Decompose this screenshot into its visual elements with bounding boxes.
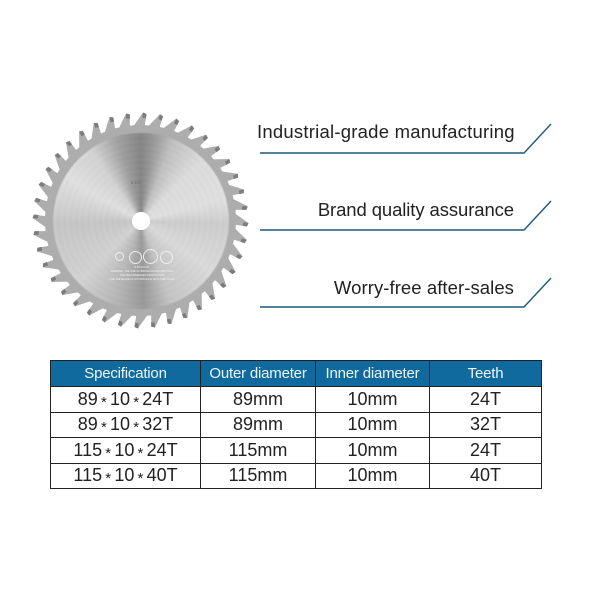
specification table: 89mm	[233, 414, 283, 434]
specification table: 115mm	[229, 440, 287, 460]
specification table: 115*10*40T	[73, 465, 178, 487]
feature text: Worry-free after-sales	[334, 277, 514, 298]
specification table: Outer diameter	[209, 365, 307, 382]
specification table: 89*10*24T	[78, 389, 173, 411]
feature text: Brand quality assurance	[318, 199, 514, 220]
specification table: 32T	[470, 414, 501, 434]
top blade marking: S 10T	[131, 180, 141, 185]
specification table: 10mm	[347, 440, 398, 460]
underline with slanted tick	[260, 124, 552, 154]
specification table: 24T	[470, 440, 501, 460]
specification table: 89mm	[233, 389, 283, 409]
specification table: 24T	[470, 389, 501, 409]
underline with slanted tick	[260, 278, 552, 308]
feature: worry-free after-sales	[260, 277, 552, 308]
polished disc	[52, 132, 228, 308]
blade engraving: USE THE BLADE IN ACCORDANCE WITH THE RULES	[109, 278, 175, 281]
specification table: 10mm	[347, 389, 398, 409]
feature text: Industrial-grade manufacturing	[257, 121, 515, 142]
blade teeth and outer ring	[32, 112, 248, 328]
specification table: 115*10*24T	[73, 440, 178, 462]
feature: brand quality assurance	[260, 199, 552, 231]
blade engraving	[109, 266, 175, 281]
certification seals	[115, 249, 173, 264]
specification table: Teeth	[468, 365, 503, 382]
specification table: 89*10*32T	[78, 414, 173, 436]
underline with slanted tick	[260, 200, 552, 231]
specification table: 115mm	[229, 465, 287, 485]
blade engraving: WARNING: THE USE OF BRUSH GUARD AND TOOL	[110, 270, 174, 273]
specification table: 10mm	[347, 414, 398, 434]
blade engraving: B 89x10x24T	[134, 266, 150, 269]
specification table: 10mm	[347, 465, 398, 485]
specification table	[50, 360, 542, 489]
specification table: Inner diameter	[326, 365, 419, 382]
specification table: 40T	[470, 465, 501, 485]
blade engraving: THE RECOMMENDED PROTECTION	[120, 274, 164, 277]
centre hole	[132, 212, 150, 230]
specification table: Specification	[84, 365, 167, 382]
saw blade	[32, 112, 248, 328]
feature: industrial-grade manufacturing	[257, 121, 552, 154]
